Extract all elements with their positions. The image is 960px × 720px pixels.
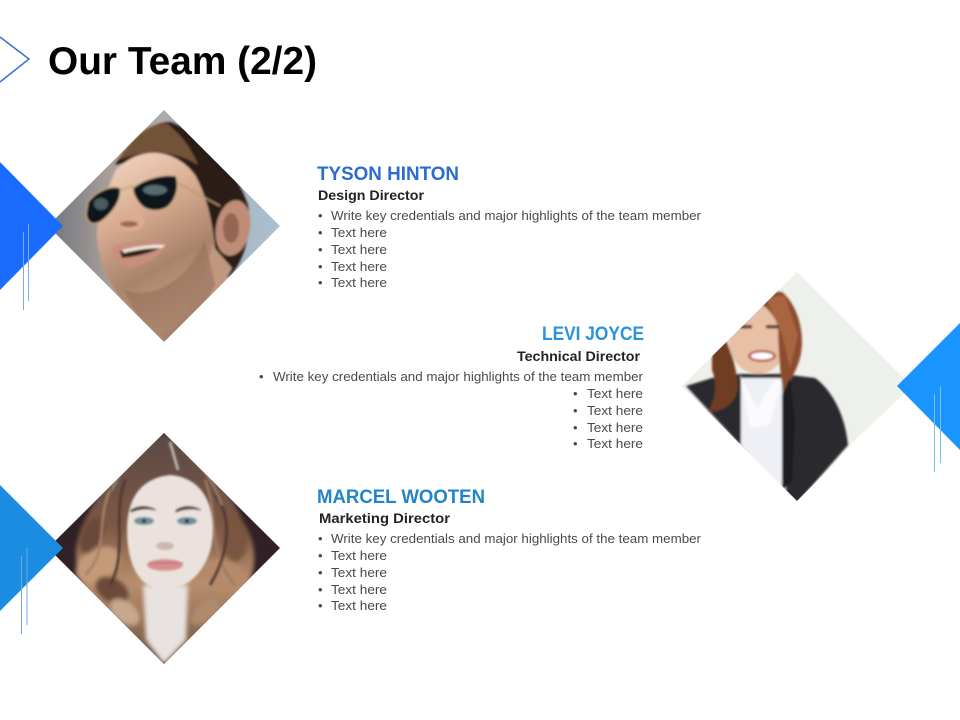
text block: Marcel Wooten: Write key credentials and major highlights of the team member [331,531,702,546]
text block: Tyson Hinton: • [318,275,323,290]
text block: Tyson Hinton: • [318,208,323,223]
text block: Tyson Hinton: • [318,225,323,240]
text block: Marcel Wooten: • [318,565,323,580]
text block: Tyson Hinton: Text here [331,259,387,274]
text block: Tyson Hinton: Design Director [318,187,425,203]
text block: Tyson Hinton: Write key credentials and major highlights of the team member [331,208,702,223]
text block: Tyson Hinton [317,164,702,290]
text block: Levi Joyce: Technical Director [517,348,641,364]
text block: Marcel Wooten: • [318,531,323,546]
text block: Marcel Wooten: • [318,548,323,563]
text block: Marcel Wooten: Text here [331,582,387,597]
decoration: blue triangle with lines, row 2 [897,323,960,472]
text block: Levi Joyce [259,324,644,451]
portrait: Levi Joyce [682,272,912,503]
text block: Levi Joyce: LEVI JOYCE [542,324,644,345]
text block: Levi Joyce: • [259,369,264,384]
text block: Marcel Wooten: Text here [331,548,387,563]
text block: Levi Joyce: • [573,420,578,435]
decoration: blue triangle with lines, row 3 [0,485,63,634]
text block: Levi Joyce: Text here [587,386,643,401]
text block: Levi Joyce: • [573,436,578,451]
decoration: blue triangle with lines, row 1 [0,162,63,310]
text block: Levi Joyce: • [573,403,578,418]
text block: Marcel Wooten [317,487,702,613]
text block: Marcel Wooten: Marketing Director [319,510,451,526]
text block: Marcel Wooten: Text here [331,565,387,580]
text block: Levi Joyce: • [573,386,578,401]
text block: Marcel Wooten: • [318,598,323,613]
portrait: Tyson Hinton [48,110,280,342]
text block: Levi Joyce: Write key credentials and major highlights of the team member [273,369,644,384]
title: Our Team (2/2) [48,40,317,83]
text block: Tyson Hinton: Text here [331,225,387,240]
text block: Levi Joyce: Text here [587,436,643,451]
text block: Tyson Hinton: • [318,259,323,274]
text block: Tyson Hinton: Text here [331,242,387,257]
text block: Tyson Hinton: Text here [331,275,387,290]
portrait: Marcel Wooten [48,433,280,665]
text block: Tyson Hinton: • [318,242,323,257]
text block: Marcel Wooten: MARCEL WOOTEN [317,487,485,508]
text block: Tyson Hinton: TYSON HINTON [317,164,459,185]
text block: Levi Joyce: Text here [587,420,643,435]
text block: Marcel Wooten: Text here [331,598,387,613]
icon: header chevron [0,37,29,82]
text block: Levi Joyce: Text here [587,403,643,418]
text block: Marcel Wooten: • [318,582,323,597]
